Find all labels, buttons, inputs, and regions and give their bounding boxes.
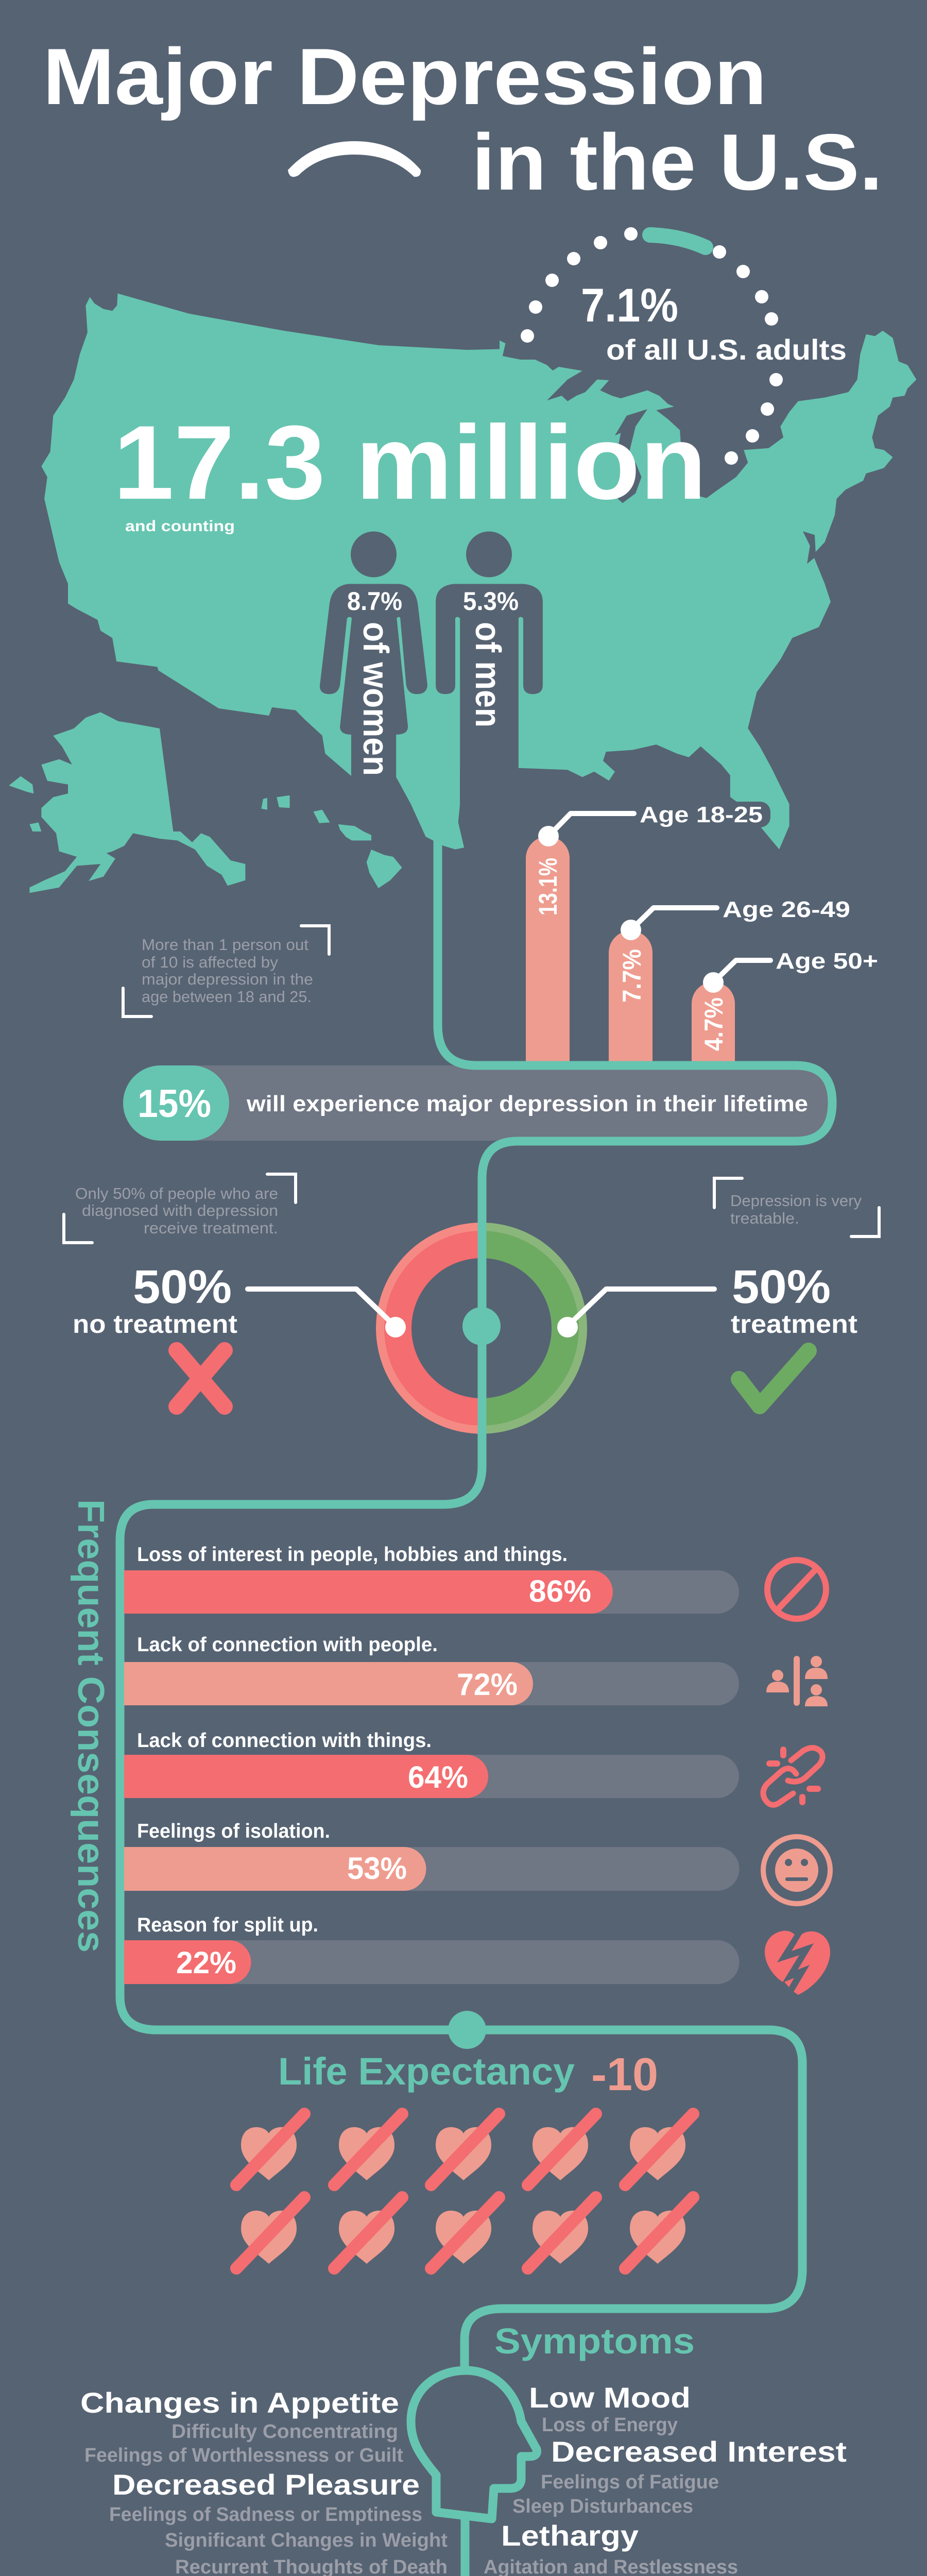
map of the United States	[9, 294, 916, 893]
bar: split up: 22%	[176, 1945, 236, 1980]
women percentage	[347, 587, 402, 776]
note: age: of 10 is affected by	[142, 953, 279, 971]
callout: no treatment: 50%	[133, 1261, 232, 1313]
bar: things: Lack of connection with things.	[137, 1730, 432, 1752]
bar: split up	[124, 1914, 740, 1984]
node: life expectancy	[448, 2011, 486, 2049]
women percentage: of women	[356, 622, 396, 776]
heads of the figures	[351, 532, 512, 577]
note: treatable: Depression is very	[730, 1192, 862, 1210]
woman figure	[320, 584, 427, 777]
callout: treatment	[557, 1261, 857, 1338]
title	[43, 32, 883, 207]
note: age: age between 18 and 25.	[142, 988, 312, 1006]
title: Major Depression	[43, 32, 767, 121]
symptoms right list: Lethargy	[501, 2519, 639, 2552]
symptoms left list: Decreased Pleasure	[112, 2468, 420, 2501]
bar: loss of interest: 86%	[529, 1574, 591, 1608]
mainland	[41, 294, 916, 850]
note: treatment share: receive treatment.	[144, 1219, 278, 1237]
heading: life expectancy	[278, 2049, 658, 2100]
heading: symptoms: Symptoms	[494, 2321, 695, 2361]
note: treatable: treatable.	[730, 1209, 799, 1227]
note: treatment share: Only 50% of people who are	[75, 1184, 278, 1202]
note: treatment share: diagnosed with depression	[82, 1201, 278, 1219]
crossed hearts	[236, 2114, 693, 2268]
age bar chart	[526, 802, 878, 1062]
bar: isolation	[124, 1820, 740, 1891]
age labels	[640, 802, 878, 974]
bar values	[534, 858, 728, 1051]
symptoms left list: Changes in Appetite	[80, 2386, 399, 2419]
icon: neutral face	[763, 1837, 830, 1904]
icon: check	[739, 1351, 809, 1406]
headline stat: and counting	[125, 518, 235, 535]
lifetime pill: will experience major depression in their lifetime	[246, 1091, 808, 1116]
hawaii	[261, 795, 402, 888]
icon: title frown	[288, 141, 421, 177]
callout: treatment: treatment	[731, 1310, 857, 1338]
symptoms right list: Sleep Disturbances	[512, 2496, 693, 2517]
adults ring: 7.1%	[581, 279, 678, 332]
icon: separated people	[766, 1656, 828, 1706]
man figure	[436, 584, 543, 804]
bar values: 13.1%	[534, 858, 562, 916]
consequences bars	[124, 1544, 740, 1984]
icon: cross	[177, 1350, 225, 1406]
age labels: Age 26-49	[723, 897, 850, 922]
donut centre node	[462, 1307, 501, 1345]
bar: age 50+	[692, 982, 735, 1062]
age labels: Age 50+	[776, 948, 878, 974]
bar values: 4.7%	[699, 997, 728, 1051]
headline stat: 17.3 million	[113, 404, 707, 521]
bar: people: Lack of connection with people.	[137, 1634, 438, 1656]
lifetime pill	[123, 1065, 834, 1141]
alaska	[9, 712, 245, 893]
lifetime pill: 15%	[138, 1082, 211, 1126]
symptoms right list: Feelings of Fatigue	[541, 2471, 719, 2493]
connector pipe	[120, 824, 832, 2576]
title: in the U.S.	[472, 117, 883, 207]
symptoms left list	[80, 2386, 448, 2576]
bar: things: 64%	[408, 1760, 468, 1794]
bar: split up: Reason for split up.	[137, 1914, 318, 1936]
icon: prohibited	[767, 1560, 826, 1619]
symptoms right list: Loss of Energy	[542, 2414, 678, 2436]
heart row two	[236, 2197, 693, 2268]
men percentage	[463, 587, 519, 727]
symptoms left list: Feelings of Worthlessness or Guilt	[84, 2445, 403, 2466]
icon: broken link	[763, 1748, 822, 1805]
bar values: 7.7%	[617, 949, 646, 1003]
leader dots	[538, 826, 724, 993]
men percentage: of men	[468, 622, 508, 727]
bar: isolation: 53%	[347, 1851, 407, 1886]
bar: loss of interest	[124, 1544, 739, 1614]
symptoms left list: Feelings of Sadness or Emptiness	[109, 2504, 422, 2526]
leaders	[548, 814, 770, 982]
bar: things	[124, 1730, 739, 1798]
heart row one	[236, 2114, 693, 2185]
great lakes cut-outs	[615, 409, 816, 564]
symptoms left list: Significant Changes in Weight	[165, 2530, 448, 2551]
bar: people: 72%	[457, 1667, 518, 1702]
callout: no treatment: no treatment	[73, 1310, 237, 1338]
symptoms right list: Decreased Interest	[551, 2435, 847, 2468]
callout: treatment: 50%	[732, 1261, 831, 1313]
callout: no treatment	[73, 1261, 406, 1338]
note: age: More than 1 person out	[142, 936, 308, 954]
bar: people	[124, 1634, 739, 1705]
men percentage: 5.3%	[463, 587, 519, 616]
symptoms right list	[484, 2381, 847, 2576]
label backing on florida	[632, 802, 770, 827]
bar: age 26-49	[609, 930, 653, 1062]
adults ring: of all U.S. adults	[606, 333, 847, 366]
bar: isolation: Feelings of isolation.	[137, 1820, 330, 1842]
donut chart	[376, 1223, 587, 1434]
note: treatable	[714, 1178, 879, 1236]
icon: head outline	[411, 2370, 537, 2519]
bar: age 18-25	[526, 837, 570, 1062]
heading: life expectancy: Life Expectancy	[278, 2050, 575, 2093]
heading: frequent consequences: Frequent Consequences	[70, 1499, 111, 1953]
bar: loss of interest: Loss of interest in people, hobbies and things.	[137, 1544, 568, 1566]
note: age	[123, 926, 329, 1016]
adults ring	[521, 227, 847, 465]
icon: broken heart	[765, 1931, 830, 1995]
note: treatment share	[64, 1174, 296, 1243]
heading: life expectancy: -10	[591, 2049, 658, 2100]
symptoms left list: Difficulty Concentrating	[171, 2421, 398, 2443]
note: age: major depression in the	[142, 970, 313, 988]
symptoms right list: Low Mood	[529, 2381, 691, 2414]
women percentage: 8.7%	[347, 587, 402, 616]
age labels: Age 18-25	[640, 802, 763, 827]
